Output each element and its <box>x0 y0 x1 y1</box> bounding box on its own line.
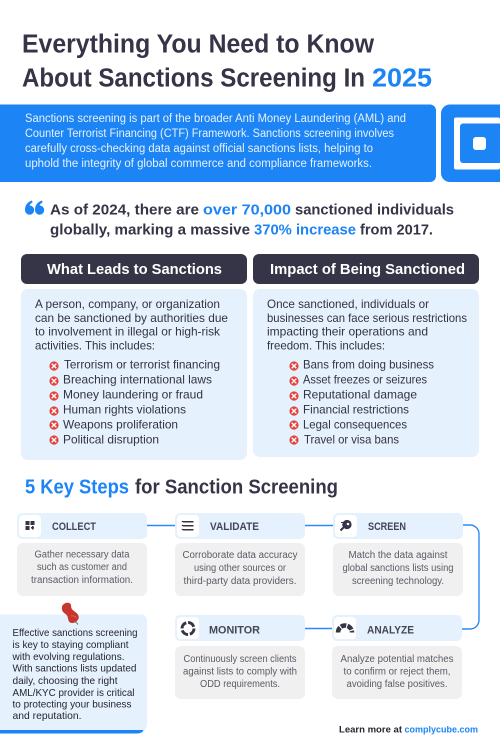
statistic quote: 370% increase <box>254 222 356 238</box>
list: causes of sanctions <box>49 358 220 446</box>
list: causes of sanctions: Human rights violations <box>63 402 186 416</box>
step: screen: screening technology. <box>352 576 444 587</box>
step: analyze: Analyze potential matches <box>340 654 454 665</box>
step: collect: COLLECT <box>52 521 96 533</box>
footer link: complycube.com <box>404 724 478 736</box>
title: 2025 <box>372 64 432 92</box>
icon: brand cube logo <box>441 104 500 182</box>
step: analyze: avoiding false positives. <box>346 679 448 690</box>
list: causes of sanctions: Terrorism or terrorist financing <box>64 358 220 372</box>
step: validate: VALIDATE <box>210 521 259 533</box>
list: impacts of sanctions: Reputational damage <box>303 388 417 402</box>
step: monitor: ODD requirements. <box>200 679 280 690</box>
step: validate: third-party data providers. <box>184 576 296 587</box>
icon: screen <box>335 515 357 537</box>
heading: 5 key steps: for Sanction Screening <box>135 476 338 498</box>
panel: impact of being sanctioned: freedom. This includes: <box>267 338 385 352</box>
intro banner: Counter Terrorist Financing (CTF) Framework. Sanctions screening involves <box>25 128 394 140</box>
title <box>22 30 432 92</box>
statistic quote <box>50 202 454 238</box>
panel heading: impact of being sanctioned <box>253 254 479 284</box>
icon: collect <box>19 515 41 537</box>
callout: effective screening note <box>0 614 147 734</box>
callout: effective screening note: and reputation. <box>12 711 82 722</box>
step: analyze <box>332 615 462 699</box>
panel: impact of being sanctioned: impacting their operations and <box>267 324 428 338</box>
list: causes of sanctions: Breaching international laws <box>63 372 212 386</box>
panel: what leads to sanctions: A person, company, or organization <box>35 297 220 311</box>
panel: what leads to sanctions: can be sanctioned by authorities due <box>35 311 228 325</box>
footer link <box>339 724 478 736</box>
step: screen: Match the data against <box>348 550 448 561</box>
step: validate: using other sources or <box>194 563 287 574</box>
intro banner: uphold the integrity of global commerce and compliance frameworks. <box>25 158 372 170</box>
callout: effective screening note: Effective sanctions screening <box>12 628 138 639</box>
title: Everything You Need to Know <box>22 30 374 58</box>
panel: what leads to sanctions: activities. This includes: <box>35 338 155 352</box>
step: collect: Gather necessary data <box>34 550 130 560</box>
heading: 5 key steps <box>25 476 338 498</box>
step: collect <box>17 513 147 596</box>
panel: impact of being sanctioned: businesses can face serious restrictions <box>267 311 467 325</box>
step: collect: such as customer and <box>37 562 127 573</box>
list: causes of sanctions: Political disruption <box>63 432 159 446</box>
connector arrows between steps <box>147 525 479 629</box>
panel: what leads to sanctions: to involvement in illegal or high-risk <box>35 324 221 338</box>
panel: impact of being sanctioned: Once sanctioned, individuals or <box>267 297 429 311</box>
step: monitor <box>175 615 305 699</box>
intro banner: carefully cross-checking data against official sanctions lists, helping to <box>25 143 373 155</box>
icon: monitor <box>177 617 199 639</box>
panel: impact of being sanctioned <box>253 289 479 457</box>
callout: effective screening note: with evolving regulations. <box>12 652 125 663</box>
statistic quote: from 2017. <box>360 222 433 238</box>
heading: 5 key steps: 5 Key Steps <box>25 476 129 498</box>
step: monitor: against lists to comply with <box>183 666 297 678</box>
callout: effective screening note: is key to staying compliant <box>12 640 129 651</box>
intro banner <box>0 104 436 182</box>
list: impacts of sanctions: Travel or visa bans <box>304 432 399 446</box>
intro banner: Sanctions screening is part of the broader Anti Money Laundering (AML) and <box>25 113 406 125</box>
step: screen: SCREEN <box>368 521 406 533</box>
icon: quotation mark <box>25 200 44 215</box>
icon: red push pin <box>62 603 79 624</box>
list: impacts of sanctions: Asset freezes or seizures <box>303 372 427 386</box>
statistic quote: globally, marking a massive <box>50 222 250 238</box>
statistic quote: over 70,000 <box>203 202 291 218</box>
step: validate: Corroborate data accuracy <box>182 550 298 561</box>
step: analyze: to confirm or reject them, <box>344 666 450 678</box>
title: About Sanctions Screening In <box>22 64 365 92</box>
icon: analyze <box>334 617 356 639</box>
list: causes of sanctions: Weapons proliferation <box>63 418 178 432</box>
statistic quote: sanctioned individuals <box>295 202 454 218</box>
step: screen <box>333 513 463 596</box>
step: monitor: MONITOR <box>209 624 260 636</box>
list: impacts of sanctions: Bans from doing business <box>303 358 434 372</box>
callout: effective screening note: With sanctions lists updated <box>12 664 137 674</box>
list: causes of sanctions: Money laundering or fraud <box>63 388 203 402</box>
list: impacts of sanctions: Financial restrictions <box>303 402 409 416</box>
callout: effective screening note: daily, choosing the right <box>12 676 118 687</box>
list: impacts of sanctions <box>289 358 434 446</box>
step: monitor: Continuously screen clients <box>184 654 296 665</box>
step: collect: transaction information. <box>31 575 133 586</box>
list: impacts of sanctions: Legal consequences <box>303 418 407 432</box>
statistic quote: As of 2024, there are <box>50 202 199 218</box>
callout: effective screening note: to protecting your business <box>12 700 132 710</box>
step: screen: global sanctions lists using <box>342 563 454 574</box>
callout: effective screening note: AML/KYC provider is critical <box>12 688 134 699</box>
step: validate <box>175 513 305 596</box>
panel heading: impact of being sanctioned: Impact of Being Sanctioned <box>270 261 465 278</box>
panel heading: what leads to sanctions: What Leads to Sanctions <box>47 261 222 278</box>
panel: what leads to sanctions <box>21 289 247 460</box>
step: analyze: ANALYZE <box>367 624 414 636</box>
footer link: Learn more at <box>339 724 403 736</box>
icon: validate <box>177 515 199 537</box>
panel heading: what leads to sanctions <box>21 254 247 284</box>
